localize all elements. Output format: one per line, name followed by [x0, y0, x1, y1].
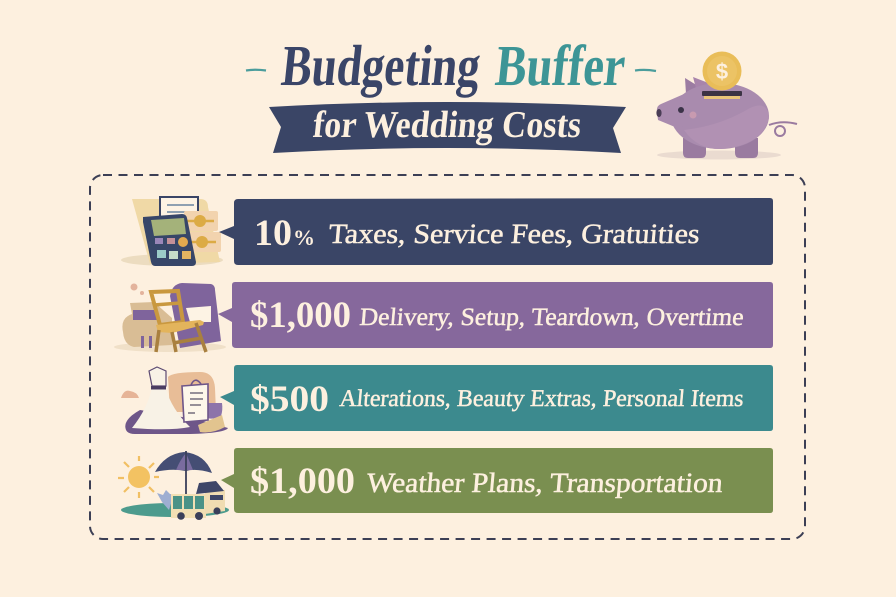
icon: chair and delivery bags [114, 283, 226, 352]
panel: dashed frame [90, 175, 805, 539]
icon: piggy bank: $ [716, 59, 728, 84]
title: Budgeting [279, 33, 483, 98]
bar: 10% taxes: % [293, 225, 315, 250]
bar: $500 alterations [220, 365, 773, 431]
icon: calculator and receipts [121, 197, 223, 266]
bar: 10% taxes: 10 [254, 213, 292, 254]
bar: $1,000 weather: $1,000 [250, 461, 355, 502]
bar: 10% taxes: Taxes, Service Fees, Gratuities [327, 219, 701, 250]
bar: $500 alterations: Alterations, Beauty Extras, Personal Items [338, 386, 745, 412]
bar: $1,000 delivery [218, 282, 773, 348]
bar: $500 alterations: $500 [250, 379, 329, 420]
bar: $1,000 weather [221, 448, 773, 513]
icon: wedding dress and clipboard [121, 367, 228, 434]
title: Buffer [493, 33, 628, 98]
bar: 10% taxes [219, 198, 773, 265]
bar: $1,000 delivery: $1,000 [250, 295, 351, 336]
bar: $1,000 weather: Weather Plans, Transportation [365, 468, 724, 499]
icon: piggy bank [656, 52, 797, 160]
icon: sun, umbrella and shuttle [118, 451, 229, 520]
subtitle ribbon: for Wedding Costs [311, 104, 583, 146]
bar: $1,000 delivery: Delivery, Setup, Teardown, Overtime [358, 304, 745, 331]
title [246, 33, 656, 98]
